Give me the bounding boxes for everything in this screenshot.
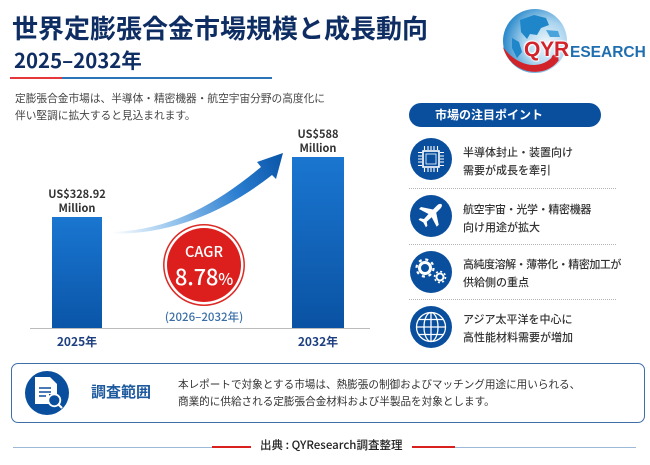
point 3 text: 高純度溶解・薄帯化・精密加工が [463, 256, 621, 272]
label 2032 value: Million [300, 140, 336, 156]
CAGR period: (2026–2032年) [165, 309, 243, 325]
label 2025 value: US$328.92 [48, 186, 106, 202]
arrow: growth [117, 153, 283, 234]
logo: QYResearch [503, 9, 646, 73]
source note: 出典 : QYResearch調査整理 [260, 437, 402, 453]
panel: scope [11, 363, 645, 423]
point 2 text: 向け用途が拡大 [463, 219, 540, 235]
logo: QYResearch: QYR [524, 38, 569, 61]
label 2032 value: US$588 [298, 126, 338, 142]
panel heading: 市場の注目ポイント [435, 106, 543, 123]
point 2 text: 航空宇宙・光学・精密機器 [463, 201, 591, 217]
footer rule: right [455, 446, 636, 448]
point 1 text: 需要が成長を牽引 [463, 162, 551, 178]
subtitle: period: 2025–2032年 [14, 44, 142, 74]
footer rule: left [13, 446, 212, 448]
point 1 text: 半導体封止・装置向け [463, 144, 573, 160]
CAGR badge: 8.78% [175, 260, 233, 292]
CAGR badge [163, 224, 245, 306]
label 2032 value [298, 126, 338, 156]
point 3 text [463, 256, 622, 290]
scope text: 商業的に供給される定膨張合金材料および半製品を対象とします。 [178, 394, 495, 409]
point 4 text: アジア太平洋を中心に [463, 311, 573, 327]
title underline [10, 76, 272, 78]
label 2025: 2025年 [57, 333, 97, 350]
label 2032: 2032年 [298, 333, 338, 350]
footer accent: right [412, 446, 455, 448]
icon: gears [410, 251, 452, 293]
point 4 text [463, 311, 573, 345]
bar 2032 [292, 157, 344, 328]
point 4 text: 高性能材料需要が増加 [463, 329, 573, 345]
panel heading [409, 103, 601, 127]
point 3 text: 供給側の重点 [463, 274, 529, 290]
icon: document search [25, 371, 69, 415]
footer accent: left [212, 446, 251, 448]
axis line [30, 328, 370, 329]
title: 世界定膨張合金市場規模と成長動向 [12, 9, 428, 46]
icon: globe [410, 306, 452, 348]
logo: QYResearch: ESEARCH [570, 44, 646, 61]
label 2025 value: Million [59, 200, 95, 216]
icon: airplane [410, 195, 452, 237]
scope text: 本レポートで対象とする市場は、熱膨張の制御およびマッチング用途に用いられる、 [178, 377, 580, 392]
chart: market size bars [30, 126, 370, 350]
scope text [178, 377, 580, 409]
point 2 text [463, 201, 592, 235]
intro text: 伴い堅調に拡大すると見込まれます。 [15, 108, 196, 123]
CAGR badge: CAGR [185, 241, 223, 262]
point 1 text [463, 144, 573, 178]
intro text: 定膨張合金市場は、半導体・精密機器・航空宇宙分野の高度化に [15, 91, 325, 106]
bar 2025 [52, 217, 102, 328]
label 2025 value [48, 186, 106, 216]
scope heading: 調査範囲 [91, 381, 151, 402]
icon: chip [410, 138, 452, 180]
intro text [15, 91, 325, 123]
